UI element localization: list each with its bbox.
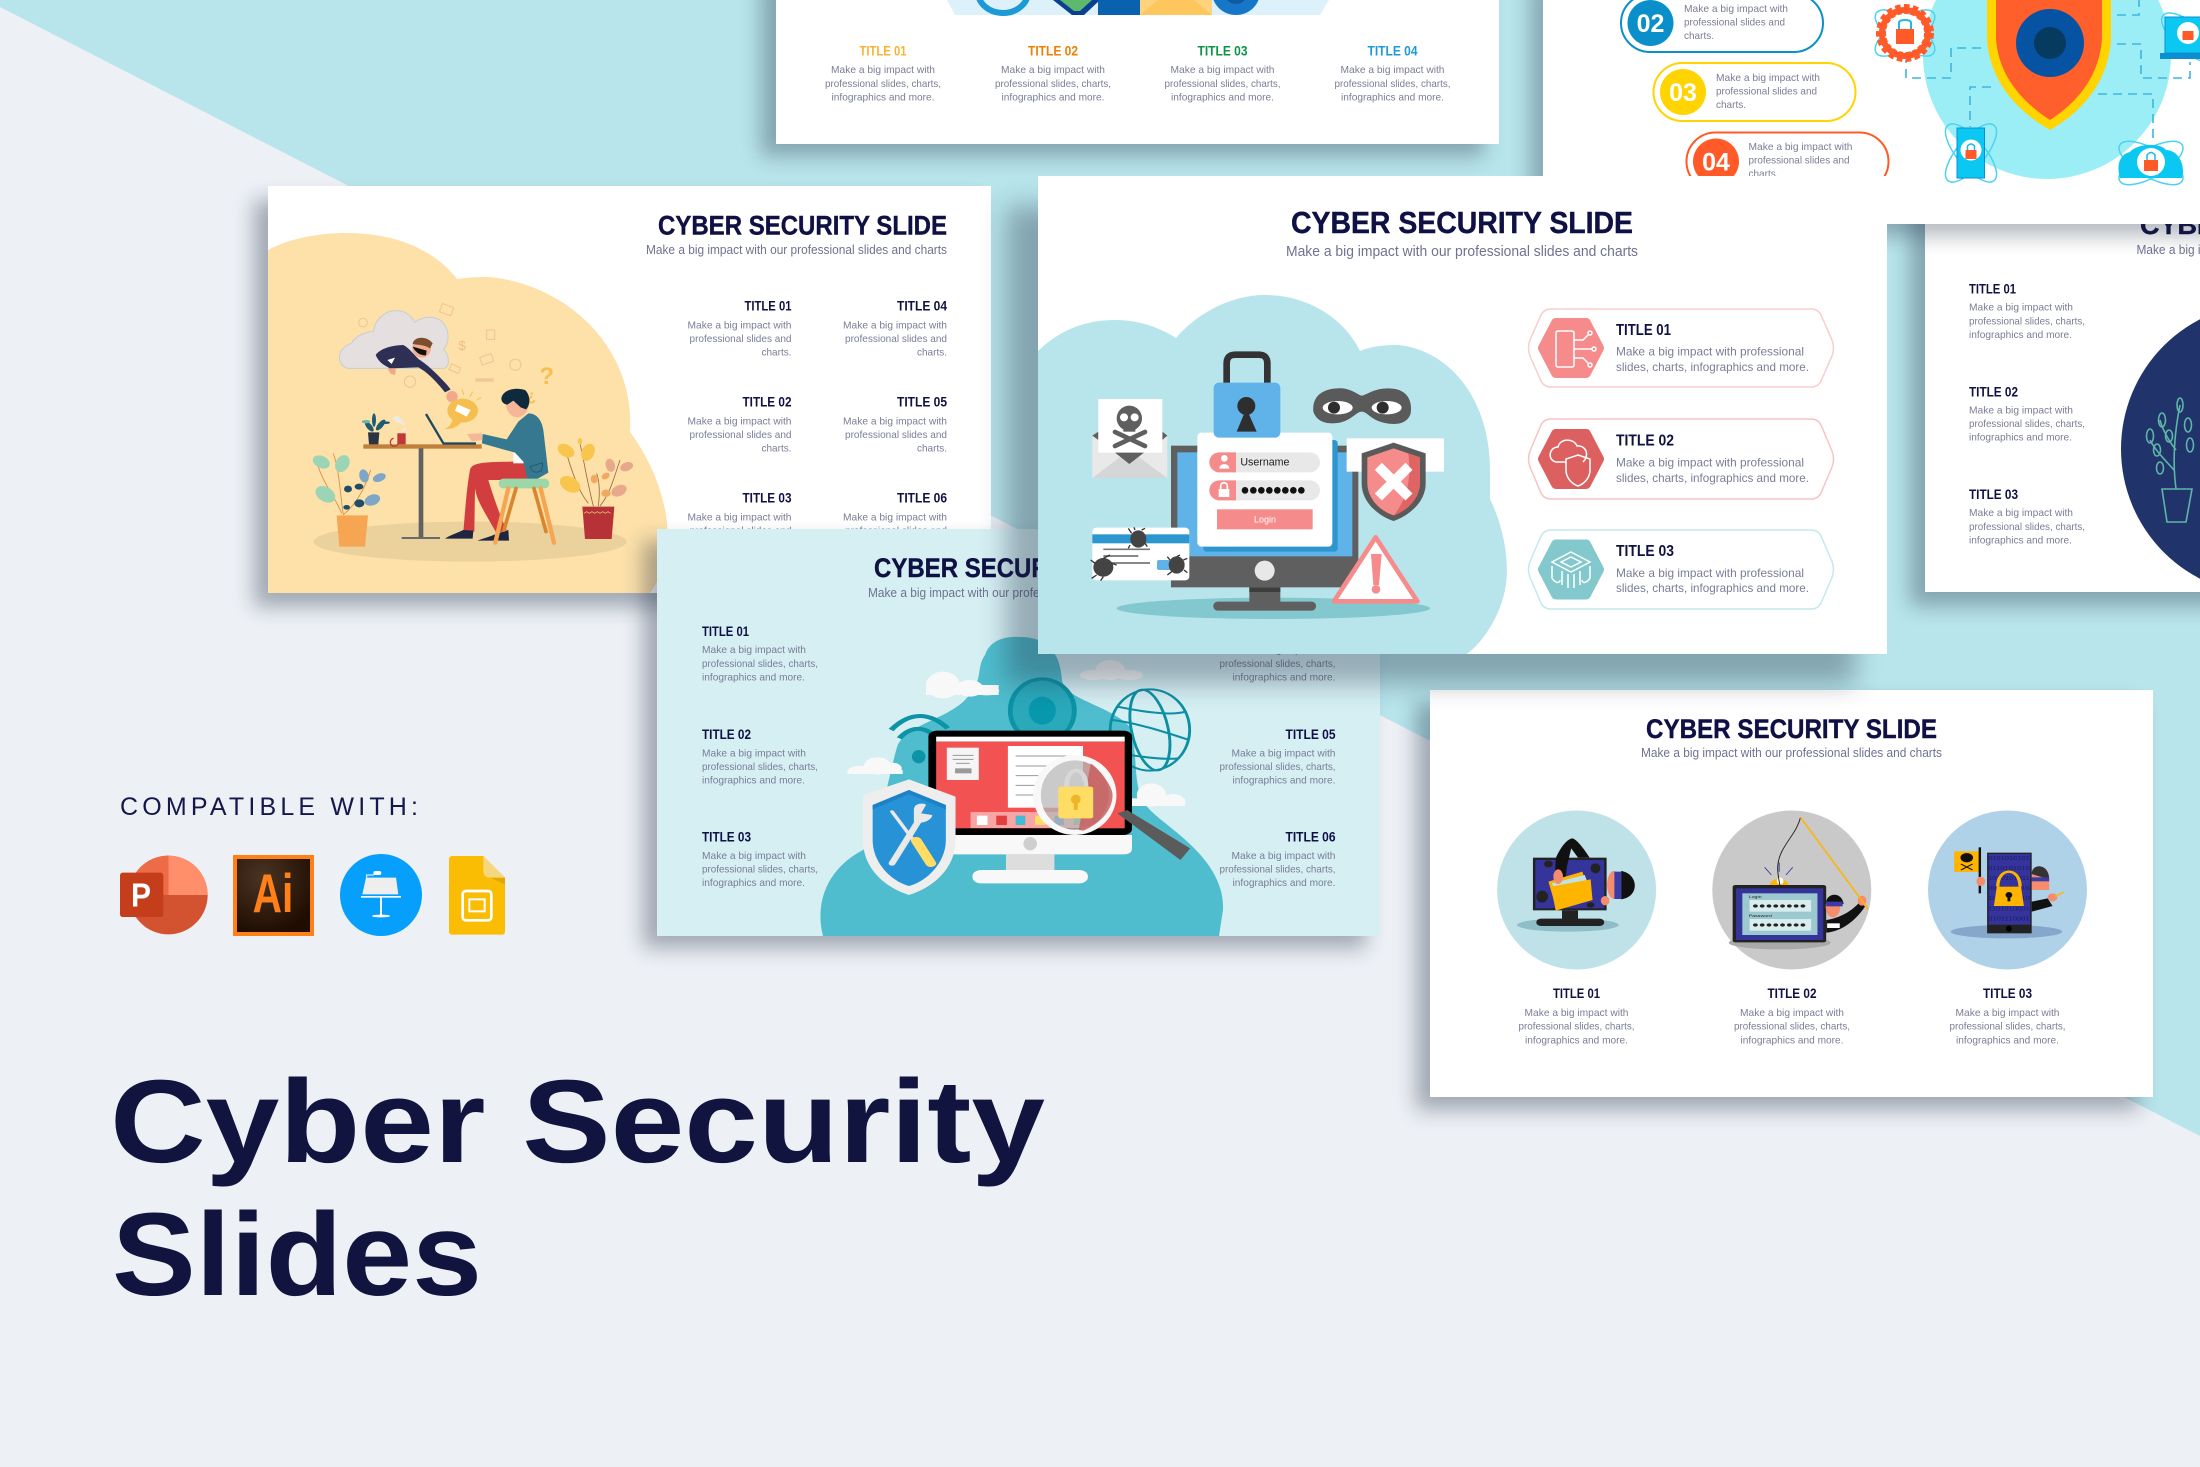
pill 03: 03 — [1669, 79, 1697, 107]
item: title 03: infographics and more. — [1956, 1034, 2059, 1046]
pill 02: professional slides and — [1684, 16, 1785, 28]
item: title 01: Make a big impact with — [1524, 1007, 1629, 1019]
item: title 05: TITLE 05 — [1286, 727, 1336, 742]
item: title 03: infographics and more. — [1171, 92, 1274, 104]
item: title 02: infographics and more. — [1969, 432, 2072, 444]
item: title 02: infographics and more. — [702, 774, 805, 786]
item: title 03 — [1950, 986, 2066, 1046]
heading: CYBER SECURITY SLIDE — [874, 553, 1163, 583]
phone lock — [1944, 123, 1998, 183]
item: title 03: professional slides, charts, — [1950, 1021, 2066, 1033]
card: title 03: Make a big impact with professional — [1616, 566, 1804, 580]
item: title 03: TITLE 03 — [742, 490, 792, 506]
item: title 01: Make a big impact with — [688, 320, 792, 332]
pill 03: professional slides and — [1716, 86, 1817, 98]
slide: centre login illustration — [1006, 176, 1887, 684]
card: title 03 — [1528, 530, 1834, 609]
heading — [1286, 205, 1638, 260]
circle illustration: phone lock hacker: 0110101010 — [1988, 866, 2030, 872]
item: title 02: charts. — [762, 442, 792, 454]
item: title 03: TITLE 03 — [1983, 986, 2032, 1001]
item: title 04 — [1334, 44, 1450, 104]
item: title 06: TITLE 06 — [1286, 830, 1336, 845]
item: title 01 — [1969, 282, 2085, 341]
item: title 03: professional slides, charts, — [1164, 78, 1280, 90]
app icons row — [120, 854, 505, 936]
circle illustration: folder theft — [1497, 810, 1656, 970]
item: title 02: Make a big impact with — [702, 747, 806, 759]
circle illustration: phone lock hacker: 0101110001 — [1988, 917, 2030, 922]
item: title 05: infographics and more. — [1232, 774, 1336, 786]
item: title 04: professional slides and — [845, 333, 947, 345]
item: title 01 — [825, 44, 941, 104]
item: title 06: professional slides and — [845, 525, 947, 537]
item: title 06 — [844, 493, 947, 529]
item: title 01: TITLE 01 — [1553, 986, 1600, 1001]
pill 03 — [1654, 63, 1856, 121]
card: title 01: Make a big impact with professional — [1616, 345, 1804, 359]
circle illustration: phone lock hacker: 1101010001 — [1988, 907, 2030, 912]
item: title 02: professional slides and — [690, 429, 792, 441]
illustration: login monitor: Login — [1254, 515, 1276, 525]
gear lock — [1874, 4, 1936, 62]
item: title 03: professional slides and — [690, 525, 792, 537]
item: title 05: Make a big impact with — [1232, 747, 1336, 759]
item: title 03: TITLE 03 — [1969, 487, 2018, 502]
main title: Cyber Security — [110, 1056, 1045, 1188]
item: title 01: infographics and more. — [1525, 1034, 1628, 1046]
item: title 01: professional slides, charts, — [1969, 315, 2085, 327]
item: title 04: infographics and more. — [1232, 672, 1336, 684]
item: title 01: TITLE 01 — [744, 298, 792, 314]
pill 04: 04 — [1702, 148, 1730, 176]
pill 02: Make a big impact with — [1684, 3, 1788, 15]
item: title 01: Make a big impact with — [702, 644, 806, 656]
slide: right navy circle — [1910, 186, 2200, 606]
item: title 01: TITLE 01 — [860, 44, 907, 58]
item: title 03: infographics and more. — [1969, 534, 2072, 546]
pill 03: charts. — [1716, 99, 1746, 111]
illustration: hacker and man at laptop — [311, 304, 634, 562]
item: title 05: Make a big impact with — [843, 416, 947, 428]
item: title 06: Make a big impact with — [1232, 850, 1336, 862]
item: title 02 — [688, 394, 792, 454]
icon: cloud shield — [1543, 434, 1599, 486]
item: title 01: infographics and more. — [702, 672, 805, 684]
item: title 03: Make a big impact with — [1969, 507, 2073, 519]
item: title 03 — [1969, 487, 2085, 546]
item: title 03: TITLE 03 — [1198, 44, 1248, 58]
item: title 01: professional slides, charts, — [825, 78, 941, 90]
card: title 02: slides, charts, infographics and more. — [1616, 471, 1809, 485]
navy circle with plant — [2121, 319, 2200, 579]
item: title 02: TITLE 02 — [1028, 44, 1078, 58]
item: title 02: Make a big impact with — [1969, 404, 2073, 416]
cloud: top right — [1080, 660, 1143, 680]
pill 03: Make a big impact with — [1716, 72, 1820, 84]
slide: teal six titles — [643, 529, 1380, 948]
item: title 04: Make a big impact with — [1340, 64, 1445, 76]
item: title 06: professional slides, charts, — [1220, 864, 1336, 876]
item: title 01: infographics and more. — [1969, 329, 2072, 341]
item: title 03: Make a big impact with — [1170, 64, 1275, 76]
item: title 06: TITLE 06 — [897, 490, 947, 506]
heading: CYBER SECURITY SLIDE — [658, 210, 947, 240]
item: title 01: Make a big impact with — [1969, 302, 2073, 314]
item: title 04 — [843, 298, 947, 358]
item: title 04: TITLE 04 — [1286, 624, 1336, 639]
item: title 02: Make a big impact with — [1740, 1007, 1844, 1019]
slide: top right pills and shield — [1530, 0, 2200, 236]
item: title 02: infographics and more. — [1740, 1034, 1844, 1046]
card: title 02: TITLE 02 — [1616, 432, 1674, 450]
item: title 01: TITLE 01 — [702, 624, 749, 639]
item: title 02: TITLE 02 — [702, 727, 751, 742]
heading — [1642, 719, 1942, 760]
pill 04: Make a big impact with — [1748, 141, 1853, 153]
illustration: shield network — [1868, 0, 2200, 193]
illustration: hacker and man at laptop: $ — [458, 338, 466, 353]
item: title 04: charts. — [917, 346, 947, 358]
slide: top centre four titles — [761, 0, 1499, 156]
main title — [110, 1056, 1045, 1321]
label: compatible with: COMPATIBLE WITH: — [120, 793, 418, 821]
item: title 02: professional slides, charts, — [1969, 418, 2085, 430]
item: title 02: professional slides, charts, — [1734, 1021, 1850, 1033]
illustration: login monitor — [1091, 355, 1444, 619]
card: title 03: slides, charts, infographics and more. — [1616, 581, 1809, 595]
cloud: upper left — [926, 672, 999, 698]
circle illustration: phishing login — [1712, 810, 1871, 970]
item: title 05: TITLE 05 — [897, 394, 947, 410]
item: title 01: charts. — [762, 346, 792, 358]
item: title 01 — [702, 624, 818, 684]
cloud: lower right — [1132, 783, 1185, 807]
item: title 02 — [995, 44, 1111, 104]
circle illustration: phishing login: Login — [1749, 895, 1762, 899]
item: title 02: TITLE 02 — [1969, 384, 2018, 400]
heading — [868, 553, 1169, 600]
item: title 05: professional slides, charts, — [1220, 761, 1336, 773]
heading: Make a big impact with our professional slides and charts — [646, 242, 947, 257]
pill 02 — [1621, 0, 1823, 52]
heading — [647, 216, 946, 256]
circle illustration: phone lock hacker: 0101010101 — [1988, 856, 2030, 862]
icon: powerpoint: P — [131, 878, 151, 915]
heading: CYBER SECURITY SLIDE — [1646, 714, 1937, 744]
item: title 02: Make a big impact with — [688, 416, 792, 428]
pill 04: professional slides and — [1748, 154, 1850, 166]
heading: Make a big impact with our professional slides and charts — [868, 585, 1169, 600]
item: title 03: TITLE 03 — [702, 830, 751, 845]
item: title 04: professional slides, charts, — [1220, 658, 1336, 670]
item: title 02 — [702, 727, 818, 786]
item: title 03: Make a big impact with — [702, 850, 806, 862]
item: title 02: infographics and more. — [1002, 92, 1104, 104]
item: title 01: professional slides, charts, — [1518, 1021, 1634, 1033]
item: title 05 — [1220, 727, 1336, 786]
heading — [2138, 224, 2200, 256]
item: title 02: TITLE 02 — [742, 394, 792, 410]
icon: illustrator — [233, 855, 314, 936]
heading: Make a big impact with our professional slides and charts — [1286, 244, 1638, 260]
item: title 02: professional slides, charts, — [995, 78, 1111, 90]
item: title 04 — [1220, 624, 1336, 684]
circle illustration: phone lock hacker — [1928, 810, 2087, 970]
illustration: monitor shield magnifier — [847, 660, 1190, 895]
item: title 02: professional slides, charts, — [702, 761, 818, 773]
illustration: hacker and man at laptop: ? — [527, 389, 536, 406]
item: title 06: Make a big impact with — [843, 512, 947, 524]
main title: Slides — [112, 1189, 482, 1321]
cloud: lower left — [847, 757, 903, 775]
item: title 06 — [1220, 830, 1336, 889]
pill 02: charts. — [1684, 30, 1714, 42]
item: title 04: Make a big impact with — [1232, 644, 1336, 656]
item: title 01: professional slides, charts, — [702, 658, 818, 670]
laptop lock — [2160, 12, 2200, 62]
item: title 02: Make a big impact with — [1001, 64, 1105, 76]
item: title 01 — [1518, 986, 1634, 1046]
icon: fingerprint chip — [1543, 544, 1599, 594]
item: title 01 — [688, 298, 792, 358]
illustration: hacker and man at laptop: ? — [539, 363, 554, 390]
icon: illustrator: Ai — [253, 862, 293, 924]
item: title 03 — [688, 493, 792, 529]
circle illustration: phone lock hacker: 1010101010 — [1988, 896, 2030, 902]
circle illustration: phishing login: Password — [1749, 914, 1773, 918]
item: title 04: professional slides, charts, — [1334, 78, 1450, 90]
icon: google slides — [449, 856, 505, 935]
card: title 01: TITLE 01 — [1616, 322, 1671, 339]
card: title 02 — [1528, 419, 1834, 499]
item: title 03: Make a big impact with — [1956, 1007, 2060, 1019]
teal blob — [820, 637, 1223, 936]
item: title 02: TITLE 02 — [1768, 986, 1816, 1001]
pill 02: 02 — [1637, 10, 1664, 38]
item: title 02 — [1734, 986, 1850, 1046]
item: title 04: Make a big impact with — [843, 320, 947, 332]
illustration: login monitor: Username — [1240, 457, 1290, 469]
item: title 04: infographics and more. — [1341, 92, 1444, 104]
item: title 02 — [1969, 384, 2085, 444]
card: title 01 — [1528, 309, 1834, 387]
card: title 02: Make a big impact with professional — [1616, 456, 1804, 470]
item: title 03: professional slides, charts, — [1969, 521, 2085, 533]
item: title 03: professional slides, charts, — [702, 864, 818, 876]
item: title 03 — [702, 830, 818, 889]
icon: keynote — [340, 854, 422, 936]
yellow cloud blob — [268, 233, 667, 593]
item: title 05: charts. — [917, 442, 947, 454]
item: title 03 — [1164, 44, 1280, 104]
item: title 04: TITLE 04 — [1368, 44, 1418, 58]
heading: Make a big impact with our professional slides and charts — [1641, 745, 1942, 760]
item: title 03: infographics and more. — [702, 877, 805, 889]
item: title 01: Make a big impact with — [831, 64, 935, 76]
slide: yellow illustration — [254, 186, 991, 607]
illustration strip — [947, 0, 1329, 15]
pill 04 — [1686, 132, 1890, 176]
item: title 03: Make a big impact with — [688, 512, 792, 524]
card: title 01: slides, charts, infographics and more. — [1616, 360, 1809, 374]
item: title 04: TITLE 04 — [897, 298, 947, 314]
cloud lock — [2118, 140, 2184, 186]
circle illustration: phone lock hacker: 0010101010 — [1988, 886, 2030, 892]
pill 04: charts. — [1748, 168, 1778, 180]
slide: three hacker circles — [1416, 690, 2153, 1110]
icon: powerpoint — [120, 856, 208, 934]
item: title 01: infographics and more. — [832, 92, 934, 104]
heading: CYBER SECURITY SLIDE — [1291, 205, 1633, 240]
item: title 05: professional slides and — [845, 429, 947, 441]
item: title 01: professional slides and — [690, 333, 792, 345]
light blue cloud blob — [1038, 295, 1507, 654]
card: title 03: TITLE 03 — [1616, 543, 1674, 560]
circle illustration: phone lock hacker: 1010101011 — [1988, 876, 2030, 882]
item: title 01: TITLE 01 — [1969, 282, 2016, 296]
item: title 06: infographics and more. — [1232, 877, 1336, 889]
icon: phone circuit — [1543, 323, 1599, 373]
item: title 05 — [843, 394, 947, 454]
